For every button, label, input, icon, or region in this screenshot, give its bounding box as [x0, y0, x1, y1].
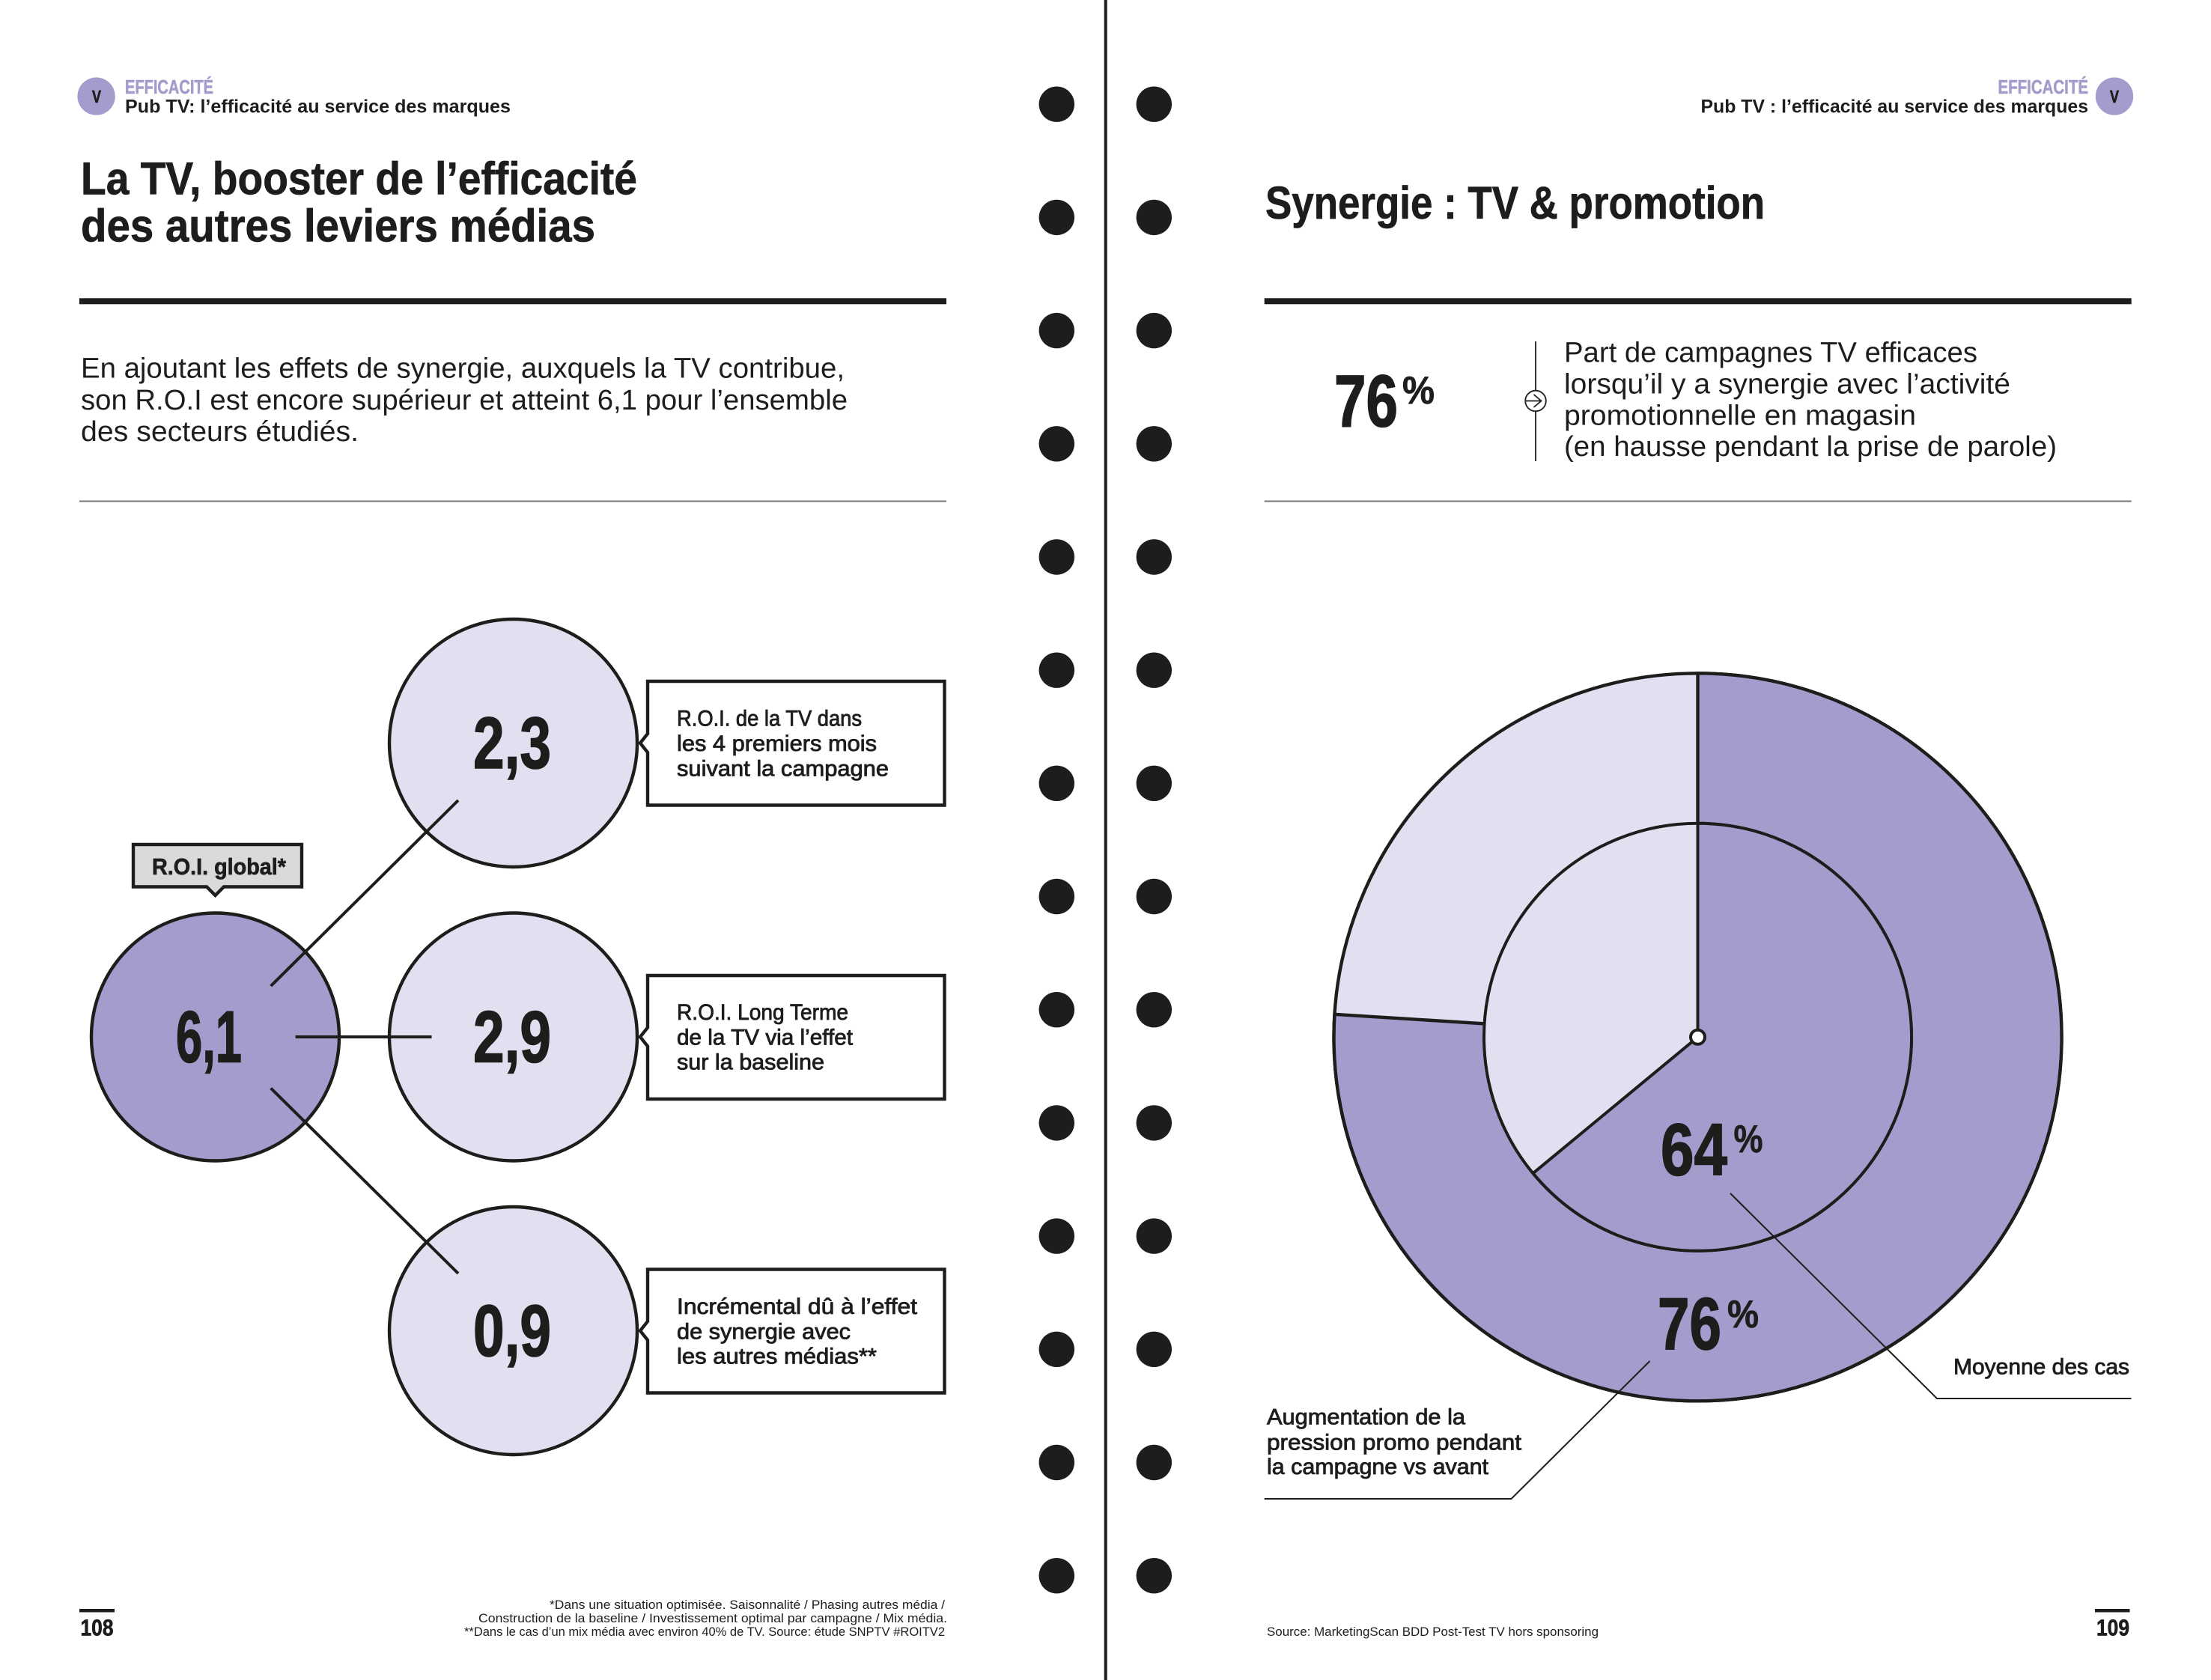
title: right page: Synergie : TV & promotion	[1265, 177, 1765, 228]
panel: right page header	[1701, 76, 2133, 117]
key figure: 76%: 76	[1334, 359, 1398, 442]
label: Moyenne des cas: Moyenne des cas	[1953, 1355, 2129, 1379]
value: 64%: 64	[1661, 1108, 1727, 1190]
node: 2,3 circle: 2,3	[473, 702, 551, 784]
callout: ROI long term: sur la baseline	[677, 1050, 824, 1075]
key figure: 76%: %	[1402, 369, 1435, 413]
footnote: left page: *Dans une situation optimisée. Saisonnalité / Phasing autres média /	[550, 1598, 945, 1612]
callout: R.O.I. global: R.O.I. global*	[152, 853, 287, 880]
callout: ROI 4 months: suivant la campagne	[677, 756, 889, 782]
leader line: average	[1730, 1193, 2131, 1399]
icon: chapter badge V right	[2096, 77, 2133, 115]
section label right: EFFICACITÉ	[1998, 76, 2088, 98]
callout: R.O.I. global	[133, 844, 302, 895]
node: global ROI circle: 6,1	[176, 996, 242, 1078]
text block: key figure description: Part de campagnes TV efficaces	[1564, 337, 1977, 368]
label: promo pressure: pression promo pendant	[1267, 1430, 1522, 1455]
centre point	[1691, 1030, 1705, 1044]
leader line: promo pressure	[1265, 1361, 1650, 1499]
panel: notebook spine	[1039, 0, 1172, 1680]
footer: right page number: 109	[2096, 1614, 2129, 1641]
callout: ROI 4 months: R.O.I. de la TV dans	[677, 707, 862, 731]
footer: right page number	[2095, 1609, 2129, 1641]
value: 76%: %	[1727, 1293, 1759, 1336]
footnote: left page: **Dans le cas d’un mix média avec environ 40% de TV. Source: étude SNPTV #ROITV2	[464, 1625, 945, 1639]
node: 2,9 circle	[389, 913, 637, 1160]
text block: key figure description: lorsqu’il y a synergie avec l’activité	[1564, 368, 2010, 400]
footnote: left page	[464, 1598, 947, 1639]
callout: ROI long term: R.O.I. Long Terme	[677, 1000, 848, 1025]
title: left page: des autres leviers médias	[81, 201, 595, 252]
node: 2,9 circle: 2,9	[473, 996, 551, 1078]
inner ring: 64%	[1484, 824, 1912, 1251]
label: promo pressure: Augmentation de la	[1267, 1404, 1465, 1430]
title: left page	[81, 153, 637, 252]
label: promo pressure	[1267, 1404, 1522, 1479]
callout: ROI 4 months: les 4 premiers mois	[677, 731, 877, 756]
label: promo pressure: la campagne vs avant	[1267, 1455, 1489, 1479]
text block: key figure description	[1564, 337, 2057, 463]
callout: synergy incremental: les autres médias**	[677, 1345, 877, 1369]
callout: synergy incremental	[640, 1270, 945, 1393]
callout: ROI long term	[640, 976, 945, 1099]
text block: key figure description: (en hausse pendant la prise de parole)	[1564, 431, 2057, 463]
section label: EFFICACITÉ	[125, 76, 213, 98]
connectors	[271, 800, 458, 1273]
node: global ROI circle	[91, 913, 339, 1160]
title: left page: La TV, booster de l’efficacité	[81, 153, 637, 204]
node: 0,9 circle: 0,9	[473, 1290, 551, 1372]
icon: chapter badge V	[77, 77, 115, 115]
callout: ROI 4 months	[640, 681, 945, 806]
footnote: left page: Construction de la baseline / Investissement optimal par campagne / Mix média.	[478, 1612, 947, 1625]
callout: ROI long term: de la TV via l’effet	[677, 1026, 854, 1050]
node: 2,3 circle	[389, 619, 637, 867]
panel: left page header	[77, 76, 511, 117]
chart: double donut	[1265, 673, 2131, 1499]
section subtitle: Pub TV: l’efficacité au service des marques	[125, 96, 511, 117]
chart: ROI tree diagram	[91, 619, 945, 1455]
node: 0,9 circle	[389, 1207, 637, 1455]
icon: chapter badge V right: V	[2110, 87, 2120, 106]
icon: chapter badge V: V	[92, 87, 102, 106]
value: 64%: %	[1734, 1118, 1763, 1161]
text block: intro: des secteurs étudiés.	[81, 416, 359, 448]
callout: synergy incremental: Incrémental dû à l’effet	[677, 1294, 918, 1319]
text block: intro: son R.O.I est encore supérieur et atteint 6,1 pour l’ensemble	[81, 385, 848, 416]
outer ring: 76%	[1334, 673, 2062, 1401]
callout: synergy incremental: de synergie avec	[677, 1319, 851, 1345]
text block: intro	[81, 353, 848, 448]
value: 76%: 76	[1658, 1282, 1721, 1365]
text block: key figure description: promotionnelle en magasin	[1564, 400, 1916, 431]
text block: intro: En ajoutant les effets de synergie, auxquels la TV contribue,	[81, 353, 845, 385]
icon: divider with arrow	[1525, 341, 1546, 461]
footer: left page number: 108	[81, 1614, 114, 1641]
section subtitle right: Pub TV : l’efficacité au service des marques	[1701, 96, 2088, 117]
footnote: right page source: Source: MarketingScan BDD Post-Test TV hors sponsoring	[1267, 1625, 1599, 1639]
